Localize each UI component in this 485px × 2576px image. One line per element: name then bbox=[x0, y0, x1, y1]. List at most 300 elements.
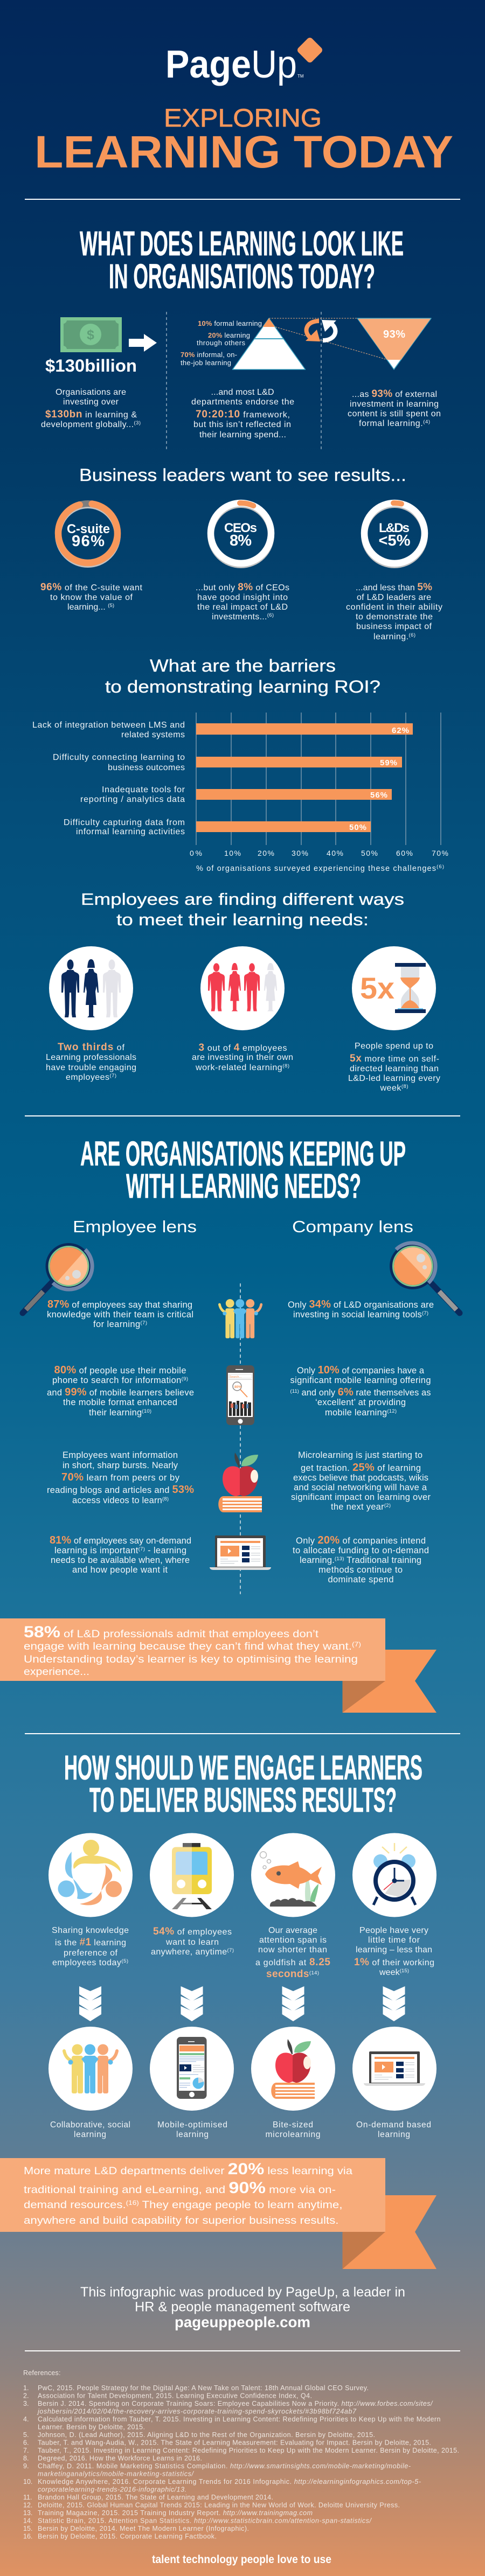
text: 81 percent: 81% of employees say on-demand bbox=[50, 1534, 191, 1546]
callout: 58 percent banner: (7) bbox=[352, 1640, 361, 1648]
callout: 58 percent banner: experience... bbox=[24, 1666, 89, 1678]
text: 81 percent: needs to be available when, where bbox=[51, 1555, 190, 1565]
text: time for learning: little time for bbox=[368, 1936, 420, 1945]
text: references: Learner. Bersin by Deloitte, 2015. bbox=[38, 2424, 145, 2431]
text: C-suite bbox=[40, 582, 143, 612]
callout: more mature departments banner: demand resources. bbox=[24, 2199, 114, 2211]
chart: L and D ring bbox=[363, 502, 426, 565]
text: external investment: ...as 93% of external bbox=[352, 388, 437, 400]
text: time for learning: (15) bbox=[400, 1968, 409, 1974]
heading: employees are finding: Employees are finding different ways bbox=[81, 890, 404, 909]
text: references: 16. bbox=[23, 2532, 32, 2540]
text: 10 percent: Only 10% of companies have a bbox=[297, 1364, 425, 1376]
text: two thirds: (7) bbox=[109, 1073, 116, 1079]
text: CEOs: (6) bbox=[267, 612, 274, 618]
text: time for learning: learning – less than bbox=[356, 1945, 432, 1954]
text: sharing knowledge: employees today bbox=[52, 1958, 121, 1967]
text: references: 13. bbox=[23, 2509, 32, 2517]
icon: chevrons column 1 bbox=[79, 1986, 101, 2021]
text: 10 percent: (12) bbox=[387, 1408, 397, 1414]
text: L and D: learning. bbox=[373, 632, 408, 641]
panel: CEOs bbox=[196, 502, 289, 622]
text: 80 percent: phone to search for information bbox=[52, 1376, 181, 1385]
text: 87 percent: 87% of employees say that sharing bbox=[47, 1299, 192, 1310]
text: three of four: 3 out of 4 employees bbox=[198, 1042, 287, 1053]
label: mobile: Mobile-optimised bbox=[157, 2120, 227, 2130]
panel: attention span bbox=[251, 1833, 335, 1980]
heading: barriers: What are the barriers bbox=[150, 656, 336, 675]
text: CEOs: investments... bbox=[212, 612, 267, 622]
callout: more mature departments banner: anywhere and build capability for superior business results. bbox=[24, 2215, 338, 2226]
heading: barriers bbox=[105, 656, 380, 696]
text: CEOs bbox=[196, 582, 289, 622]
axis title: % of organisations surveyed experiencing these challenges bbox=[196, 864, 436, 873]
text: 70 percent: access videos to learn bbox=[72, 1496, 162, 1505]
bar: tools 56 bbox=[196, 789, 392, 800]
text: references: 6. bbox=[23, 2439, 29, 2446]
icon: banknote: $ bbox=[87, 327, 94, 343]
bar: integration 62: 62% bbox=[392, 726, 409, 735]
text: L and D: of L&D leaders are bbox=[357, 593, 431, 602]
icon: phone search: 80% bbox=[234, 1385, 241, 1389]
icon: apple on books bbox=[251, 2027, 335, 2111]
text: references: 3. bbox=[23, 2400, 29, 2407]
text: five times bbox=[348, 1042, 440, 1093]
text: organisations are investing: development globally... bbox=[41, 420, 134, 429]
bar: connecting 59: 59% bbox=[380, 758, 397, 767]
text: C-suite: 96% of the C-suite want bbox=[40, 582, 143, 593]
panel: collaborative learning bbox=[48, 2027, 133, 2139]
text: references: 8. bbox=[23, 2455, 29, 2462]
panel: time for learning bbox=[352, 1833, 436, 1977]
text: 80 percent: 80% of people use their mobile bbox=[54, 1364, 186, 1376]
text: organisations are investing: investing over bbox=[63, 397, 119, 407]
axis labels: 40% bbox=[327, 849, 343, 857]
text: 80 percent: (9) bbox=[182, 1376, 188, 1382]
text: two thirds: Two thirds of bbox=[58, 1042, 125, 1053]
text: references: Degreed, 2016. How the Workforce Learns in 2016. bbox=[38, 2455, 202, 2462]
text: attention span: (14) bbox=[309, 1970, 319, 1976]
text: sharing knowledge: is the #1 learning bbox=[55, 1937, 126, 1948]
panel: anywhere anytime bbox=[150, 1833, 234, 1957]
heading: employees are finding bbox=[81, 890, 404, 929]
text: produced by PageUp: This infographic was produced by PageUp, a leader in bbox=[80, 2285, 405, 2300]
text: five times: directed learning than bbox=[350, 1064, 439, 1073]
text: 25 percent: get traction. 25% of learning bbox=[301, 1462, 421, 1474]
text: five times: L&D-led learning every bbox=[348, 1074, 440, 1083]
text: references: Bersin by Deloitte, 2014. Meet The Modern Learner (Infographic). bbox=[38, 2525, 249, 2532]
callout: 58 percent banner bbox=[0, 1618, 436, 1713]
panel: investment bbox=[41, 317, 157, 429]
text: time for learning bbox=[354, 1926, 434, 1977]
chart: C-suite ring bbox=[54, 500, 121, 567]
text: 70 percent: (8) bbox=[162, 1496, 169, 1502]
chart: L and D ring: L&Ds bbox=[379, 521, 410, 535]
text: 25 percent bbox=[291, 1450, 431, 1512]
icon: people two of three bbox=[49, 946, 133, 1030]
text: references: Tauber, T. and Wang-Audia, W., 2015. The State of Learning Measurement: Evaluating for Impact. Bersin by Deloitte, 2015. bbox=[38, 2439, 431, 2446]
category labels: Difficulty capturing data from bbox=[64, 818, 185, 827]
panel: 70:20:10 pyramid bbox=[181, 318, 387, 439]
text: L and D: ...and less than 5% bbox=[356, 582, 432, 593]
heading: barriers: to demonstrating learning ROI? bbox=[105, 677, 380, 696]
text: references: 4. bbox=[23, 2416, 29, 2423]
text: 20 percent: dominate spend bbox=[328, 1575, 393, 1584]
panel: three of four bbox=[192, 946, 293, 1072]
text: 25 percent: significant impact on learning over bbox=[291, 1492, 431, 1502]
text: external investment: investment in learning bbox=[350, 400, 439, 409]
text: organisations are investing bbox=[41, 388, 141, 429]
bar: integration 62 bbox=[196, 723, 413, 735]
text: five times: week bbox=[380, 1084, 401, 1093]
text: C-suite: learning... bbox=[67, 603, 106, 612]
text: five times: People spend up to bbox=[355, 1042, 433, 1051]
text: 70 percent: in short, sharp bursts. Nearly bbox=[63, 1461, 178, 1470]
icon: alarm clock bbox=[352, 1833, 436, 1917]
panel: C-suite bbox=[40, 500, 143, 612]
title bbox=[34, 103, 453, 177]
text: anywhere anytime: 54% of employees bbox=[153, 1926, 232, 1937]
text: 34 percent bbox=[288, 1299, 434, 1320]
text: 20 percent: Only 20% of companies intend bbox=[296, 1534, 426, 1546]
icon: arrow bbox=[129, 334, 157, 352]
chart: C-suite ring: C-suite bbox=[67, 522, 110, 536]
axis labels: 0% bbox=[190, 849, 202, 857]
icon: orange swap arrow bbox=[306, 321, 320, 341]
text: references: Johnson, D. (Lead Author), 2015. Aligning L&D to the Rest of the Organization. Bersin by Deloitte, 2015. bbox=[38, 2431, 375, 2439]
heading: employee lens: Employee lens bbox=[73, 1217, 197, 1236]
text: most departments endorse: their learning spend... bbox=[199, 430, 286, 439]
text: two thirds: employees bbox=[66, 1073, 109, 1082]
text: 81 percent: learning is important bbox=[54, 1546, 138, 1555]
text: 87 percent: knowledge with their team is critical bbox=[47, 1310, 193, 1320]
text: references: Training Magazine, 2015. 2015 Training Industry Report. http://www.trainingmag.com bbox=[38, 2509, 313, 2517]
text: references: 2. bbox=[23, 2392, 29, 2400]
category labels: Difficulty connecting learning to bbox=[53, 753, 185, 762]
callout: 58 percent banner: engage with learning because they can’t find what they want. bbox=[24, 1640, 307, 1652]
callout: more mature departments banner bbox=[0, 2158, 436, 2269]
text: 80 percent: and 99% of mobile learners believe bbox=[47, 1386, 194, 1398]
text: sharing knowledge bbox=[52, 1926, 129, 1967]
pyramid labels: 20% learning bbox=[208, 331, 250, 339]
icon: banknote bbox=[60, 317, 122, 352]
text: 10 percent: ‘excellent’ at providing bbox=[315, 1398, 406, 1407]
logo: PageUp: PageUp bbox=[165, 43, 297, 86]
text: L and D bbox=[346, 582, 442, 641]
text: references: Deloitte, 2015. Global Human Capital Trends 2015: Leading in the New World of Work. Deloitte University Press. bbox=[38, 2501, 400, 2509]
text: references bbox=[23, 2369, 459, 2540]
icon: white swap arrow bbox=[322, 320, 336, 340]
text: time for learning: 1% of their working bbox=[354, 1957, 434, 1968]
text: references: marketinganalytics/mobile-marketing-statistics/ bbox=[38, 2470, 195, 2477]
text: attention span: seconds bbox=[266, 1968, 309, 1980]
icon: people three of four bbox=[200, 946, 285, 1030]
text: references: Chaffey, D. 2011. Mobile Marketing Statistics Compilation. http://www.smartinsights.com/mobile-marketing/mobile- bbox=[38, 2462, 411, 2470]
text: references: Knowledge Anywhere, 2016. Corporate Learning Trends for 2016 Infographic. http://elearninginfographics.com/top-5- bbox=[38, 2478, 421, 2486]
text: C-suite: to know the value of bbox=[50, 593, 133, 602]
text: most departments endorse: ...and most L&D bbox=[211, 388, 274, 397]
text: 34 percent: (7) bbox=[422, 1310, 428, 1316]
text: 25 percent: execs believe that podcasts, wikis bbox=[293, 1473, 428, 1483]
heading: how should we engage bbox=[64, 1748, 422, 1819]
label: on-demand: learning bbox=[378, 2130, 410, 2139]
text: three of four: work-related learning bbox=[196, 1063, 282, 1072]
text: L and D: (6) bbox=[408, 632, 415, 638]
text: references: Bersin by Deloitte, 2015. Corporate Learning Factbook. bbox=[38, 2532, 217, 2540]
text: references: 1. bbox=[23, 2384, 29, 2392]
icon: 5x hourglass bbox=[352, 946, 436, 1030]
title: LEARNING TODAY bbox=[34, 127, 453, 177]
text: three of four bbox=[192, 1042, 293, 1072]
text: references: 9. bbox=[23, 2462, 29, 2470]
text: references: 15. bbox=[23, 2525, 32, 2532]
text: 10 percent: mobile learning bbox=[325, 1408, 387, 1418]
text: attention span bbox=[255, 1926, 330, 1980]
text: references: Tauber, T., 2015. Investing in Learning Content: Redefining Priorities to Keep Up with the Modern Learner. Bersin by Deloitte, 2015. bbox=[38, 2447, 459, 2454]
text: CEOs: have good insight into bbox=[197, 593, 288, 602]
text: 20 percent: Traditional training bbox=[344, 1555, 421, 1565]
heading: company lens: Company lens bbox=[292, 1217, 413, 1236]
text: five times: 5x more time on self- bbox=[350, 1053, 439, 1064]
text: references: joshbersin/2014/02/04/the-recovery-arrives-corporate-training-spend-skyrockets/#3b98bf724ab7 bbox=[37, 2407, 357, 2415]
text: 10 percent: (11) bbox=[290, 1388, 299, 1394]
text: references: Bersin J. 2014. Spending on Corporate Training Soars: Employee Capabilities Now a Priority. http://www.forbes.com/sites/ bbox=[38, 2400, 433, 2407]
icon: phone search bbox=[226, 1365, 254, 1425]
text: 34 percent: Only 34% of L&D organisations are bbox=[288, 1299, 434, 1310]
panel: mobile learning bbox=[150, 2027, 234, 2139]
icon: laptop bbox=[210, 1535, 271, 1570]
text: organisations are investing: $130bn in learning & bbox=[45, 409, 137, 420]
bar: capturing 50 bbox=[196, 821, 371, 832]
text: external investment bbox=[348, 388, 441, 428]
callout: 58 percent banner: Understanding today’s learner is key to optimising the learning bbox=[24, 1653, 358, 1665]
text: three of four: are investing in their own bbox=[192, 1053, 293, 1062]
chart: L and D ring: <5% bbox=[378, 532, 411, 549]
text: references: References: bbox=[23, 2369, 60, 2377]
text: references: corporatelearning-trends-2016-infographic/13. bbox=[38, 2486, 186, 2494]
text: 70 percent: Employees want information bbox=[63, 1450, 178, 1460]
icon: chevrons column 2 bbox=[181, 1986, 203, 2021]
text: 10 percent: and only bbox=[299, 1388, 338, 1398]
category labels: Inadequate tools for bbox=[102, 785, 185, 794]
text: produced by PageUp bbox=[80, 2285, 405, 2330]
text: references: 7. bbox=[23, 2447, 29, 2454]
text: 20 percent: learning. bbox=[300, 1555, 335, 1565]
label: collaborative: learning bbox=[74, 2130, 106, 2139]
icon: phone search: Search... bbox=[230, 1376, 241, 1379]
text: anywhere anytime: anywhere, anytime bbox=[151, 1947, 227, 1957]
chart: pyramid bbox=[233, 318, 305, 369]
text: 81 percent: (7) bbox=[138, 1546, 145, 1552]
text: time for learning: People have very bbox=[359, 1926, 428, 1935]
callout: more mature departments banner: (16) bbox=[126, 2199, 139, 2207]
text: L and D: confident in their ability bbox=[346, 603, 442, 612]
label: on-demand bbox=[356, 2120, 431, 2139]
text: 80 percent: their learning bbox=[89, 1408, 142, 1418]
text: 87 percent bbox=[47, 1299, 193, 1329]
icon: goldfish bbox=[251, 1833, 335, 1917]
pyramid labels bbox=[181, 319, 262, 367]
logo: PageUp: TM bbox=[297, 74, 304, 79]
axis labels: 10% bbox=[224, 849, 241, 857]
heading: business leaders: Business leaders want to see results... bbox=[79, 465, 406, 485]
text: most departments endorse: departments endorse the bbox=[191, 397, 294, 407]
connectors bbox=[269, 318, 387, 360]
text: 10 percent: 6% rate themselves as bbox=[338, 1386, 431, 1398]
text: 10 percent bbox=[290, 1364, 431, 1418]
text: references: 14. bbox=[23, 2517, 32, 2525]
label: collaborative: Collaborative, social bbox=[50, 2120, 130, 2130]
bar: connecting 59 bbox=[196, 757, 402, 767]
pyramid labels: 70% informal, on- bbox=[181, 351, 237, 359]
text: anywhere anytime: want to learn bbox=[165, 1938, 219, 1947]
label: mobile: learning bbox=[176, 2130, 209, 2139]
text: attention span: attention span is bbox=[259, 1936, 327, 1945]
callout: more mature departments banner: More mature L&D departments deliver 20% less learning via bbox=[24, 2160, 352, 2178]
icon: laptop bbox=[352, 2027, 436, 2111]
text: references: 10. bbox=[23, 2478, 32, 2486]
icon: social trio bbox=[48, 2027, 133, 2111]
text: references: PwC, 2015. People Strategy for the Digital Age: A New Take on Talent: 18th Annual Global CEO Survey. bbox=[38, 2384, 369, 2392]
text: references: Association for Talent Development, 2015. Learning Executive Confidence Index, Q4. bbox=[38, 2392, 312, 2400]
pyramid labels: through others bbox=[197, 339, 246, 347]
text: 80 percent: the mobile format enhanced bbox=[63, 1398, 177, 1407]
tagline: talent technology people love to use bbox=[152, 2553, 331, 2566]
text: 80 percent: (10) bbox=[142, 1408, 151, 1414]
text: attention span: Our average bbox=[268, 1926, 317, 1935]
text: 20 percent: (13) bbox=[335, 1556, 344, 1562]
callout: 58 percent banner: 58% of L&D professionals admit that employees don’t bbox=[24, 1623, 319, 1641]
icon: chevrons column 3 bbox=[282, 1986, 304, 2021]
label: on-demand: On-demand based bbox=[356, 2120, 431, 2130]
text: 10 percent: significant mobile learning offering bbox=[290, 1376, 431, 1385]
axis labels: 50% bbox=[361, 849, 378, 857]
panel: five times bbox=[348, 946, 440, 1093]
icon: right magnifier bbox=[390, 1239, 460, 1313]
text: sharing knowledge: preference of bbox=[64, 1949, 118, 1958]
category labels bbox=[32, 721, 185, 836]
panel: sharing knowledge bbox=[48, 1833, 133, 1967]
text: 20 percent bbox=[293, 1534, 429, 1584]
panel: two thirds bbox=[46, 946, 136, 1082]
text: external investment: content is still spent on bbox=[348, 409, 441, 418]
text: two thirds: have trouble engaging bbox=[46, 1063, 136, 1072]
text: most departments endorse: 70:20:10 framework, bbox=[196, 409, 290, 420]
text: five times: (8) bbox=[401, 1084, 408, 1090]
figure: 130 billion: $130billion bbox=[45, 356, 137, 375]
text: most departments endorse bbox=[191, 388, 294, 439]
callout: more mature departments banner: They engage people to learn anytime, bbox=[139, 2199, 343, 2211]
text: references: Calculated information from Tauber, T. 2015. Investing in Learning Content: Redefining Priorities to Keep Up with the Modern bbox=[38, 2416, 441, 2423]
chart: inverted triangle: 93% bbox=[383, 329, 405, 340]
icon: team swirl bbox=[48, 1833, 133, 1917]
text: produced by PageUp: pageuppeople.com bbox=[175, 2314, 310, 2330]
chart: C-suite ring: 96% bbox=[72, 533, 105, 550]
category labels: Lack of integration between LMS and bbox=[32, 721, 185, 730]
pyramid labels: the-job learning bbox=[181, 359, 231, 367]
heading: employees are finding: to meet their learning needs: bbox=[116, 910, 369, 929]
chart: CEOs ring: CEOs bbox=[224, 521, 257, 535]
panel: microlearning bbox=[251, 2027, 335, 2139]
text: external investment: formal learning. bbox=[359, 419, 423, 428]
text: 25 percent: the next year bbox=[331, 1502, 384, 1512]
text: three of four: (8) bbox=[282, 1063, 289, 1069]
text: references: 5. bbox=[23, 2431, 29, 2439]
text: 81 percent: - learning bbox=[145, 1546, 186, 1555]
text: attention span: a goldfish at 8.25 bbox=[255, 1957, 330, 1968]
axis labels: 70% bbox=[432, 849, 448, 857]
text: organisations are investing: Organisations are bbox=[56, 388, 126, 397]
text: references: Statistic Brain, 2015. Attention Span Statistics. http://www.statisticbrain.com/attention-span-statistics/ bbox=[38, 2517, 372, 2525]
icon: social trio bbox=[219, 1299, 261, 1338]
bar: capturing 50: 50% bbox=[349, 823, 366, 832]
axis title: (6) bbox=[436, 864, 444, 870]
panel: on-demand learning bbox=[352, 2027, 436, 2139]
text: 81 percent bbox=[50, 1534, 191, 1575]
text: two thirds: Learning professionals bbox=[46, 1053, 136, 1062]
text: sharing knowledge: (5) bbox=[121, 1958, 128, 1964]
text: 81 percent: and how people want it bbox=[72, 1565, 168, 1575]
text: organisations are investing: (3) bbox=[134, 420, 141, 426]
category labels: reporting / analytics data bbox=[80, 795, 185, 804]
text: CEOs: ...but only 8% of CEOs bbox=[196, 582, 289, 593]
text: 20 percent: to allocate funding to on-demand bbox=[293, 1546, 429, 1555]
text: produced by PageUp: HR & people management software bbox=[135, 2300, 350, 2315]
text: 87 percent: for learning bbox=[93, 1320, 140, 1329]
heading: are organisations keeping up bbox=[80, 1134, 406, 1205]
text: 25 percent: Microlearning is just starting to bbox=[298, 1450, 422, 1460]
icon: chevrons column 4 bbox=[383, 1986, 405, 2021]
chart: CEOs ring bbox=[210, 502, 272, 565]
label: microlearning: Bite-sized bbox=[273, 2120, 313, 2130]
text: two thirds bbox=[46, 1042, 136, 1082]
text: time for learning: week bbox=[379, 1968, 400, 1977]
text: 34 percent: investing in social learning tools bbox=[293, 1310, 422, 1320]
text: CEOs: the real impact of L&D bbox=[197, 603, 288, 612]
axis labels bbox=[190, 849, 448, 857]
text: 87 percent: (7) bbox=[141, 1320, 147, 1326]
text: C-suite: (5) bbox=[108, 603, 114, 609]
axis labels: 60% bbox=[396, 849, 413, 857]
text: 25 percent: (2) bbox=[384, 1503, 391, 1509]
text: 70 percent: reading blogs and articles and 53% bbox=[47, 1484, 194, 1496]
category labels: related systems bbox=[121, 730, 185, 739]
title: EXPLORING bbox=[164, 103, 322, 132]
text: L and D: business impact of bbox=[356, 622, 432, 631]
text: sharing knowledge: Sharing knowledge bbox=[52, 1926, 129, 1935]
label: collaborative bbox=[50, 2120, 130, 2139]
heading: what does learning look like bbox=[80, 224, 404, 296]
label: microlearning bbox=[265, 2120, 320, 2139]
callout: more mature departments banner: traditional training and eLearning, and 90% more via on- bbox=[24, 2179, 336, 2197]
icon: left magnifier bbox=[23, 1243, 97, 1313]
text: anywhere anytime bbox=[151, 1926, 234, 1957]
chart: CEOs ring: 8% bbox=[230, 532, 252, 549]
text: references: Brandon Hall Group, 2015. The State of Learning and Development 2014. bbox=[38, 2494, 273, 2501]
chart: inverted triangle bbox=[357, 318, 431, 369]
text: attention span: now shorter than bbox=[258, 1945, 327, 1954]
bar: tools 56: 56% bbox=[370, 791, 387, 800]
icon: mobile dashboard bbox=[150, 2027, 234, 2111]
axis labels: 30% bbox=[292, 849, 308, 857]
panel: L and D leaders bbox=[346, 502, 442, 641]
text: 80 percent bbox=[47, 1364, 194, 1418]
text: 25 percent: and social networking will have a bbox=[294, 1483, 427, 1492]
text: references: 12. bbox=[23, 2501, 32, 2509]
pyramid labels: 10% formal learning bbox=[198, 319, 262, 327]
label: microlearning: microlearning bbox=[265, 2130, 320, 2139]
chart: barriers bar chart bbox=[32, 713, 448, 873]
